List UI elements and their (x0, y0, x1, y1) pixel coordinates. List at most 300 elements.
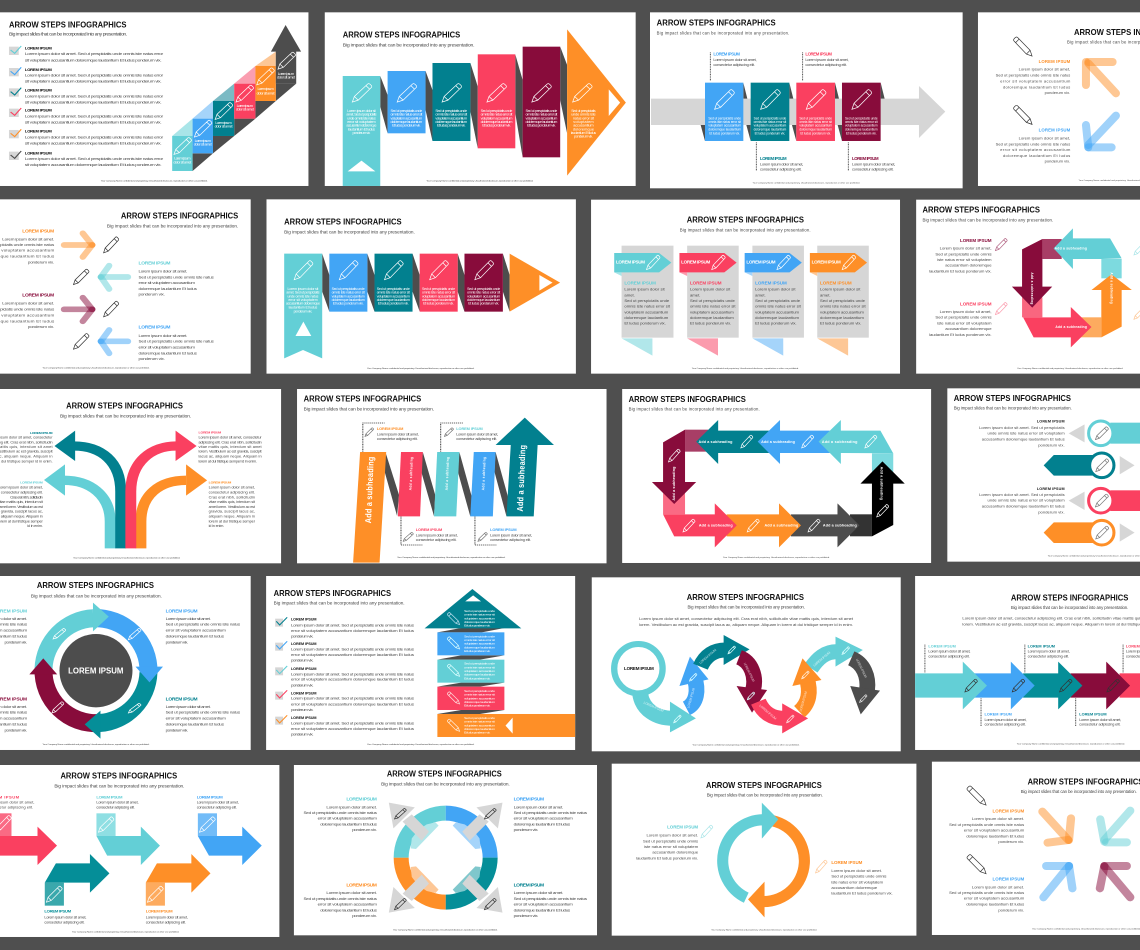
stacked arrow (425, 589, 575, 737)
zigzag bars: Add a subheading (515, 445, 528, 512)
stacked arrow: omnis iste natus error sit (464, 613, 495, 617)
checklist: LOREM IPSUM (25, 130, 52, 134)
callouts: consectetur adipiscing elit. (928, 654, 970, 658)
stacked arrow: Et ludus ponderum vix. (464, 624, 491, 628)
callouts: consectetur adipiscing elit. (416, 538, 457, 542)
card: blue: Sed ut perspiciatis unde (755, 298, 801, 303)
ribbon steps: Et ludus ponderum vix. (333, 302, 364, 306)
card: orange: Et ludus ponderum vix. (820, 321, 861, 326)
text blocks: aliquam neque. Aliquam in (209, 515, 255, 519)
rising step bars: doloremque laudantium (435, 120, 467, 124)
staircase arrow: Lorem ipsum (278, 72, 294, 76)
checklist: Lorem ipsum dolor sit amet. Sed ut perspiciatis unde omnis iste natus error (25, 114, 164, 118)
ribbon steps: accusantium doloremque (286, 302, 320, 306)
text block: orange: laudantium Et ludus ponderum vix. (831, 891, 893, 896)
checklist: ponderum vix. (291, 707, 314, 712)
footer: Your Company Name confidential and proprietary. Unauthorized disclosure, reproduction or other use prohibited. (711, 929, 817, 932)
text block: maroon: iste natus error sit voluptatem (937, 257, 992, 262)
checklist: sit voluptatem accusantium doloremque laudantium Et ludus ponderum vix. (25, 141, 162, 145)
text block: cyan: iste natus error sit voluptatem (644, 844, 699, 849)
checklist (275, 617, 414, 737)
callouts: LOREM IPSUM (416, 528, 442, 532)
rising step bars: voluptatem accusantium (435, 117, 467, 120)
callouts: Lorem ipsum dolor sit amet, (805, 57, 849, 62)
checklist: error sit voluptatem accusantium doloremque laudantium Et ludus (291, 702, 414, 706)
rising step bars: accusantium doloremque (346, 124, 377, 128)
text blocks: id in enim. (27, 524, 43, 528)
text blocks: doloremque laudantium Et ludus (320, 822, 377, 826)
callouts: consectetur adipiscing elit. (377, 437, 418, 441)
four cards: doloremque laudantium (754, 127, 787, 131)
text blocks: Lorem ipsum dolor sit amet. (166, 704, 211, 709)
subtitle: Big impact slides that can be incorporated into any presentation. (54, 784, 184, 788)
footer: Your Company Name confidential and proprietary. Unauthorized disclosure, reproduction or other use prohibited. (101, 180, 208, 182)
checklist: Lorem ipsum dolor sit amet. Sed ut perspiciatis unde omnis iste natus error (25, 51, 164, 56)
stacked arrow: Sed ut perspiciatis unde (464, 689, 495, 693)
card: cyan: Et ludus ponderum vix. (624, 321, 666, 326)
four cards: voluptatem accusantium (845, 124, 878, 128)
panel: slide 18 ring with four diagonal arrows (294, 765, 597, 935)
callouts: Lorem ipsum dolor sit amet, (416, 534, 458, 537)
text blocks: ponderum vix. (28, 260, 54, 264)
checklist: error sit voluptatem accusantium doloremque laudantium Et ludus (291, 726, 414, 731)
ribbon steps: omnis iste natus error sit (422, 291, 455, 295)
callouts: LOREM IPSUM (96, 795, 123, 799)
checklist: LOREM IPSUM (291, 716, 317, 720)
checklist: LOREM IPSUM (291, 618, 317, 622)
text blocks: LOREM IPSUM (22, 229, 54, 233)
zigzag bars: Add a subheading (481, 457, 487, 490)
text blocks: LOREM IPSUM (514, 883, 544, 888)
arrow loop: Add a subheading (699, 524, 733, 528)
callouts (925, 644, 1140, 727)
title: ARROW STEPS INFOGRAPHICS (9, 20, 127, 30)
text blocks: LOREM IPSUM (514, 797, 544, 802)
card: red: Et ludus ponderum vix. (690, 321, 731, 326)
ribbon steps (284, 254, 560, 358)
text block: blue: Lorem ipsum dolor sit amet, (1019, 135, 1070, 140)
text block: maroon: laudantium Et ludus ponderum vix. (929, 268, 992, 273)
staircase arrow: dolor sit amet (173, 161, 191, 164)
footer: Your Company Name confidential and proprietary. Unauthorized disclosure, reproduction or other use prohibited. (753, 182, 860, 185)
arrow loop (652, 420, 905, 547)
ribbon steps: doloremque laudantium (377, 298, 410, 302)
text blocks: Sed ut perspiciatis unde omnis iste natus (303, 896, 377, 901)
ribbon steps: ponderum vix. (294, 310, 312, 313)
text blocks: LOREM IPSUM (22, 293, 54, 298)
text block: orange: doloremque laudantium Et ludus (1003, 84, 1070, 89)
checklist: Lorem ipsum dolor sit amet. Sed ut perspiciatis unde omnis iste natus (291, 647, 414, 652)
staircase arrow: dolor sit amet (277, 76, 295, 80)
text blocks: Sed ut perspiciatis unde omnis iste natus (166, 622, 240, 627)
title: ARROW STEPS INFOGRAPHICS (37, 580, 154, 590)
stacked arrow: voluptatem accusantium (464, 642, 495, 646)
footer: Your Company Name confidential and proprietary. Unauthorized disclosure, reproduction or other use prohibited. (393, 929, 498, 932)
panel: slide 4 diagonal arrows (978, 12, 1140, 186)
text block: maroon: accusantium doloremque (945, 263, 992, 268)
text blocks: ponderum vix. (352, 913, 377, 918)
callouts: Lorem ipsum dolor sit amet, (44, 916, 86, 919)
text blocks: Lorem ipsum dolor sit amet. (972, 816, 1024, 821)
text blocks: lorem. Vestibulum ac est gravida, suscipit (199, 450, 262, 454)
text blocks: LOREM IPSUM (1037, 419, 1065, 423)
card: red: Lorem ipsum dolor sit (690, 287, 731, 292)
bent arrows (0, 813, 262, 906)
text blocks: Lorem ipsum dolor sit amet. (514, 890, 563, 895)
panel: slide 2 rising steps to triangle (325, 12, 636, 186)
icons: pencils (74, 237, 119, 349)
callouts: consectetur adipiscing elit. (197, 806, 237, 810)
rising step bars: Sed ut perspiciatis (571, 109, 596, 113)
text block: red: LOREM IPSUM (960, 301, 992, 306)
footer: Your Company Name confidential and proprietary. Unauthorized disclosure, reproduction or other use prohibited. (397, 556, 506, 559)
ribbon steps: doloremque laudantium (332, 298, 365, 302)
snake arrows: LOREM IPSUM (686, 687, 696, 709)
rising step bars: doloremque laudantium (390, 120, 422, 124)
text blocks: ponderum vix. (1038, 510, 1065, 515)
text blocks: Lorem ipsum dolor sit amet. (139, 269, 187, 274)
footer: Your Company Name confidential and proprietary. Unauthorized disclosure, reproduction or other use prohibited. (692, 367, 799, 370)
subtitle: Big impact slides that can be incorporated into any presentation. (922, 217, 1053, 222)
snake arrows: LOREM IPSUM (698, 648, 718, 665)
text blocks: Lorem ipsum dolor sit amet, consectetur (199, 436, 262, 440)
text blocks: error sit voluptatem accusantium (514, 816, 573, 821)
callouts: Lorem ipsum dolor sit amet, (490, 534, 532, 537)
staircase arrow (172, 25, 301, 171)
callouts: Lorem ipsum dolor sit amet, (928, 649, 971, 653)
title: ARROW STEPS INFOGRAPHICS (274, 588, 391, 598)
ribbon steps: omnis iste natus error sit (467, 291, 500, 295)
paragraph (962, 616, 1140, 626)
ribbon steps: voluptatem accusantium (422, 295, 455, 298)
callouts: LOREM IPSUM (146, 909, 173, 914)
card: red: LOREM IPSUM (690, 280, 722, 285)
ribbon steps: voluptatem accusantium (377, 295, 410, 298)
callouts (0, 795, 239, 924)
checklist: ponderum vix. (291, 732, 314, 737)
text blocks: ponderum vix. (352, 827, 377, 832)
text blocks: amet lorem. Vestibulum ac est (209, 505, 255, 509)
ribbon steps: omnis iste natus error sit (377, 291, 410, 295)
ribbon steps: laudantium Et ludus (289, 306, 318, 309)
title: ARROW STEPS INFOGRAPHICS (687, 215, 804, 225)
card: red: Sed ut perspiciatis unde (690, 298, 736, 303)
callouts: Lorem ipsum dolor sit amet, (377, 433, 419, 436)
checklist: LOREM IPSUM (25, 152, 52, 155)
checklist: LOREM IPSUM (291, 667, 317, 671)
stacked arrow: omnis iste natus error sit (464, 693, 495, 697)
callouts: Lorem ipsum dolor sit amet, (1028, 649, 1070, 653)
panel: slide 14 stacked up arrow with checklist (266, 576, 575, 750)
ribbon steps: Et ludus ponderum vix. (468, 302, 499, 306)
callouts: Lorem ipsum dolor sit amet, (96, 801, 139, 805)
snake arrows: LOREM IPSUM (743, 662, 756, 683)
panel: slide 9 curved forking arrows (0, 389, 281, 563)
text block: red (929, 301, 1007, 337)
icons: pencils (395, 808, 496, 910)
callouts: LOREM IPSUM (805, 52, 832, 57)
arrow loop: Add a subheading (672, 467, 676, 501)
gray arrow (651, 86, 945, 138)
text blocks: ponderum vix. (5, 640, 27, 644)
text block: orange (816, 860, 893, 896)
icons: pencils (52, 628, 141, 713)
callouts: Lorem ipsum dolor sit amet, (456, 433, 498, 436)
curved arrows (44, 431, 207, 548)
card: orange: Sed ut perspiciatis unde (820, 298, 866, 303)
subtitle: Big impact slides that can be incorporated into any presentation. (304, 407, 434, 411)
text blocks: LOREM IPSUM (139, 325, 171, 330)
text block: cyan (636, 825, 713, 860)
ribbon steps: unde omnis iste natus (288, 295, 319, 298)
text blocks: Lorem ipsum dolor sit amet. (514, 805, 563, 809)
rising step bars: error sit voluptatem (347, 120, 376, 124)
text blocks: Lorem ipsum dolor sit amet. (326, 890, 377, 895)
text block: blue: doloremque laudantium Et ludus (1003, 153, 1070, 158)
text blocks: doloremque laudantium Et ludus (166, 722, 224, 726)
rising step bars: doloremque laudantium (481, 120, 513, 124)
card: orange: Lorem ipsum dolor sit (820, 287, 861, 292)
text blocks: ponderum vix. (28, 324, 54, 329)
text blocks: ponderum vix. (139, 356, 165, 361)
checklist: sit voluptatem accusantium doloremque laudantium Et ludus ponderum vix. (25, 58, 162, 62)
card: blue: doloremque laudantium (755, 315, 800, 320)
rising step bars: omnis iste natus error sit (481, 113, 512, 117)
callouts: Lorem ipsum dolor sit amet, (852, 161, 895, 166)
checklist: Lorem ipsum dolor sit amet. Sed ut perspiciatis unde omnis iste natus error (25, 156, 164, 161)
card: cyan: omnis iste natus error sit (624, 304, 671, 309)
text block: blue: ponderum vix. (1045, 159, 1070, 164)
card: orange: LOREM IPSUM (812, 260, 841, 265)
text block: orange: error sit voluptatem accusantium (1000, 78, 1071, 83)
card: red: LOREM IPSUM (681, 260, 711, 265)
checklist: ponderum vix. (291, 634, 314, 639)
panel: slide 16 horizontal arrow chain (915, 576, 1140, 750)
card: blue: LOREM IPSUM (755, 280, 787, 285)
callouts: Lorem ipsum dolor sit amet, (985, 718, 1027, 722)
text block: blue: error sit voluptatem accusantium (1000, 147, 1071, 152)
callouts: Lorem ipsum dolor sit amet, (1079, 718, 1121, 722)
subtitle: Big impact slides that can be incorporated into any presentation. (284, 230, 415, 234)
arrow loop: Add a subheading (880, 467, 884, 500)
text blocks: Cras erat nibh, sollicitudin (209, 496, 255, 499)
text block: red: accusantium doloremque (945, 326, 992, 331)
text block: red: laudantium Et ludus ponderum vix. (929, 332, 992, 337)
rising step bars: voluptatem (573, 120, 594, 124)
rising step bars: natus error sit (573, 117, 594, 120)
zigzag bars (353, 418, 554, 563)
four cards: Sed ut perspiciatis unde (708, 116, 741, 120)
callouts: consectetur adipiscing elit. (456, 437, 497, 441)
footer: Your Company Name confidential and proprietary. Unauthorized disclosure, reproduction or other use prohibited. (367, 743, 475, 746)
checklist: Lorem ipsum dolor sit amet. Sed ut perspiciatis unde omnis iste natus (291, 623, 414, 627)
checklist: sit voluptatem accusantium doloremque laudantium Et ludus ponderum vix. (25, 120, 162, 125)
text blocks: error sit voluptatem accusantium (318, 816, 377, 821)
row 1 (1069, 421, 1140, 446)
checklist: error sit voluptatem accusantium doloremque laudantium Et ludus (291, 628, 414, 633)
four cards: Et ludus ponderum vix. (800, 132, 831, 136)
icons: edge pencils (1134, 243, 1140, 319)
rising step bars: Et ludus ponderum vix. (392, 124, 421, 128)
text blocks: Sed ut perspiciatis unde omnis iste natus (139, 339, 214, 344)
ribbon steps: Sed ut perspiciatis unde (332, 287, 365, 291)
card: blue: amet. (755, 292, 766, 297)
four cards: Sed ut perspiciatis unde (799, 116, 832, 120)
callouts: Lorem ipsum dolor sit amet, (713, 57, 757, 62)
text blocks: doloremque laudantium Et ludus (139, 286, 197, 291)
text blocks: vitae mattis quis, interdum sit (209, 500, 255, 504)
text blocks: doloremque laudantium Et ludus (320, 908, 377, 912)
arrow loop: Add a subheading (823, 524, 857, 528)
four cards: omnis iste natus error sit (754, 120, 786, 124)
text blocks: gravida, suscipit lacus ac, (209, 510, 255, 514)
snake arrows: LOREM IPSUM (799, 691, 808, 712)
text block: blue: LOREM IPSUM (1039, 128, 1071, 133)
text blocks: Lorem ipsum dolor sit amet. (972, 884, 1024, 889)
callouts: consectetur adipiscing elit. (760, 166, 802, 171)
card: orange: voluptatem accusantium (820, 309, 864, 314)
text blocks: ponderum vix. (514, 827, 538, 832)
footer: Your Company Name confidential and proprietary. Unauthorized disclosure, reproduction or other use prohibited. (723, 556, 830, 559)
checklist: Lorem ipsum dolor sit amet. Sed ut perspiciatis unde omnis iste natus error (25, 73, 164, 77)
card: cyan: Sed ut perspiciatis unde (624, 298, 670, 303)
arrow chain (915, 662, 1140, 709)
text blocks: Sed ut perspiciatis unde omnis iste natus (949, 890, 1024, 895)
checklist: Lorem ipsum dolor sit amet. Sed ut perspiciatis unde omnis iste natus error (25, 135, 164, 139)
icon: pencil (1014, 37, 1032, 56)
icon: orange diagonal arrow (1086, 62, 1116, 93)
text blocks: ponderum vix. (998, 839, 1024, 844)
subtitle: Big impact slides that can be incorporated into any presentation. (680, 228, 811, 233)
stacked arrow: Et ludus ponderum vix. (464, 649, 491, 653)
rising step bars: ponderum vix. (574, 135, 593, 139)
paragraph: lorem. Vestibulum ac est gravida, suscipit lacus ac, aliquam neque. Aliquam in lorem at dui tristique semper id in enim. (639, 622, 853, 627)
callouts: LOREM IPSUM (985, 713, 1012, 717)
subtitle: Big impact slides that can be incorporated into any presentation. (107, 224, 238, 229)
stacked arrow: Et ludus ponderum vix. (464, 731, 491, 735)
ribbon steps: Sed ut perspiciatis unde (377, 287, 410, 291)
stacked arrow: Et ludus ponderum vix. (464, 704, 491, 708)
text block: maroon: Lorem ipsum dolor sit amet, (940, 246, 992, 251)
panel: slide 12 circle tag arrows (947, 388, 1140, 562)
subtitle: Big impact slides that can be incorporated into any presentation. (60, 414, 191, 419)
snake arrows: LOREM IPSUM (758, 704, 777, 721)
title: ARROW STEPS INFOGRAPHICS (687, 592, 804, 602)
text blocks: lacus ac, aliquam neque. Aliquam in (199, 455, 262, 458)
text block: blue (996, 128, 1071, 164)
text blocks: doloremque laudantium Et ludus (139, 351, 197, 355)
card: red (679, 246, 739, 356)
staircase arrow: Lorem ipsum (195, 139, 211, 143)
text block: orange: Lorem ipsum dolor sit amet. (831, 868, 882, 873)
title: ARROW STEPS INFOGRAPHICS (121, 211, 238, 221)
rising step bars: unde omnis iste (571, 113, 596, 117)
text block: cyan: LOREM IPSUM (667, 825, 698, 830)
text blocks: ponderum vix. (166, 640, 188, 644)
text blocks: error sit voluptatem accusantium (166, 716, 226, 721)
callouts: LOREM IPSUM (852, 156, 879, 161)
stacked arrow: Et ludus ponderum vix. (464, 677, 491, 680)
cycle arrows (1012, 228, 1132, 347)
callouts: LOREM IPSUM (377, 427, 403, 431)
text block: maroon: LOREM IPSUM (960, 238, 992, 243)
text blocks: LOREM IPSUM (993, 808, 1025, 813)
rising step bars: accusantium (573, 124, 594, 128)
ribbon steps: amet. Sed ut perspiciatis (286, 291, 320, 295)
card: red: voluptatem accusantium (690, 309, 734, 314)
text blocks: Cras erat nibh, sollicitudin (10, 496, 43, 499)
text block: cyan: accusantium doloremque (652, 850, 699, 855)
checklist: LOREM IPSUM (25, 47, 52, 51)
four cards: Sed ut perspiciatis unde (754, 116, 787, 120)
card: red: amet. (690, 292, 700, 297)
title: ARROW STEPS INFOGRAPHICS (284, 217, 402, 226)
checklist: sit voluptatem accusantium doloremque laudantium Et ludus ponderum vix. (25, 100, 162, 104)
stacked arrow: Sed ut perspiciatis unde (464, 609, 495, 613)
callouts: consectetur adipiscing elit. (146, 921, 186, 924)
text blocks: error sit voluptatem accusantium (964, 828, 1025, 833)
callouts: consectetur adipiscing elit. (490, 538, 531, 542)
text blocks: ponderum vix. (998, 907, 1024, 912)
text blocks: doloremque laudantium Et ludus (966, 833, 1024, 838)
paragraph (639, 616, 854, 627)
callouts (363, 423, 532, 545)
four cards: voluptatem accusantium (799, 124, 832, 128)
callouts: consectetur adipiscing elit. (852, 166, 894, 171)
stacked arrow: doloremque laudantium (464, 620, 495, 624)
zigzag bars: Add a subheading (408, 457, 414, 490)
four cards: doloremque laudantium (708, 127, 741, 131)
subtitle: Big impact slides that can be incorporated into any presentation. (343, 43, 475, 48)
arrow loop: Add a subheading (822, 440, 857, 444)
card: blue: Et ludus ponderum vix. (755, 321, 797, 326)
icon: blue diagonal arrow (1086, 116, 1116, 147)
footer: Your Company Name confidential and proprietary. Unauthorized disclosure, reproduction or other use prohibited. (1017, 367, 1123, 370)
text blocks: Lorem ipsum dolor sit amet. (2, 237, 54, 241)
ring (394, 806, 498, 910)
text blocks: consectetur adipiscing elit. (1, 491, 43, 494)
stacked arrow: omnis iste natus error sit (464, 720, 495, 724)
title: ARROW STEPS INFOGRAPHICS (304, 393, 421, 404)
text blocks (949, 808, 1025, 912)
row 3 (1069, 488, 1140, 513)
text blocks: doloremque laudantium Et ludus (166, 634, 224, 638)
text blocks: LOREM IPSUM (166, 609, 198, 613)
callouts: LOREM IPSUM (456, 427, 483, 431)
card: cyan: doloremque laudantium (624, 315, 669, 320)
panel: slide 3 arrow with four cards (650, 12, 963, 188)
checklist: sit voluptatem accusantium doloremque laudantium Et ludus ponderum vix. (25, 162, 162, 167)
card: red: doloremque laudantium (690, 315, 734, 320)
zigzag bars: Add a subheading (444, 457, 450, 490)
ribbon steps: voluptatem accusantium (332, 295, 365, 298)
four cards: voluptatem accusantium (708, 124, 741, 128)
four cards: Et ludus ponderum vix. (709, 132, 740, 136)
subtitle: Big impact slides that can be incorporated into any presentation. (381, 782, 510, 787)
footer: Your Company Name confidential and proprietary. Unauthorized disclosure, reproduction or other use prohibited. (73, 556, 181, 559)
text blocks: LOREM IPSUM (209, 481, 232, 485)
text block: orange: Sed ut perspiciatis unde omnis iste natus (996, 73, 1070, 78)
callouts: LOREM IPSUM (928, 644, 956, 648)
callouts: Lorem ipsum dolor sit amet, (197, 801, 239, 805)
subtitle: Big impact slides that can be incorporated into any presentation. (629, 407, 760, 412)
card: blue: LOREM IPSUM (746, 260, 776, 265)
rising step bars: omnis iste natus error sit (526, 113, 557, 117)
text blocks: error sit voluptatem accusantium (964, 896, 1025, 901)
text blocks: error sit voluptatem accusantium (318, 902, 377, 907)
text block: maroon (929, 238, 1007, 273)
stacked arrow: doloremque laudantium (464, 727, 495, 731)
